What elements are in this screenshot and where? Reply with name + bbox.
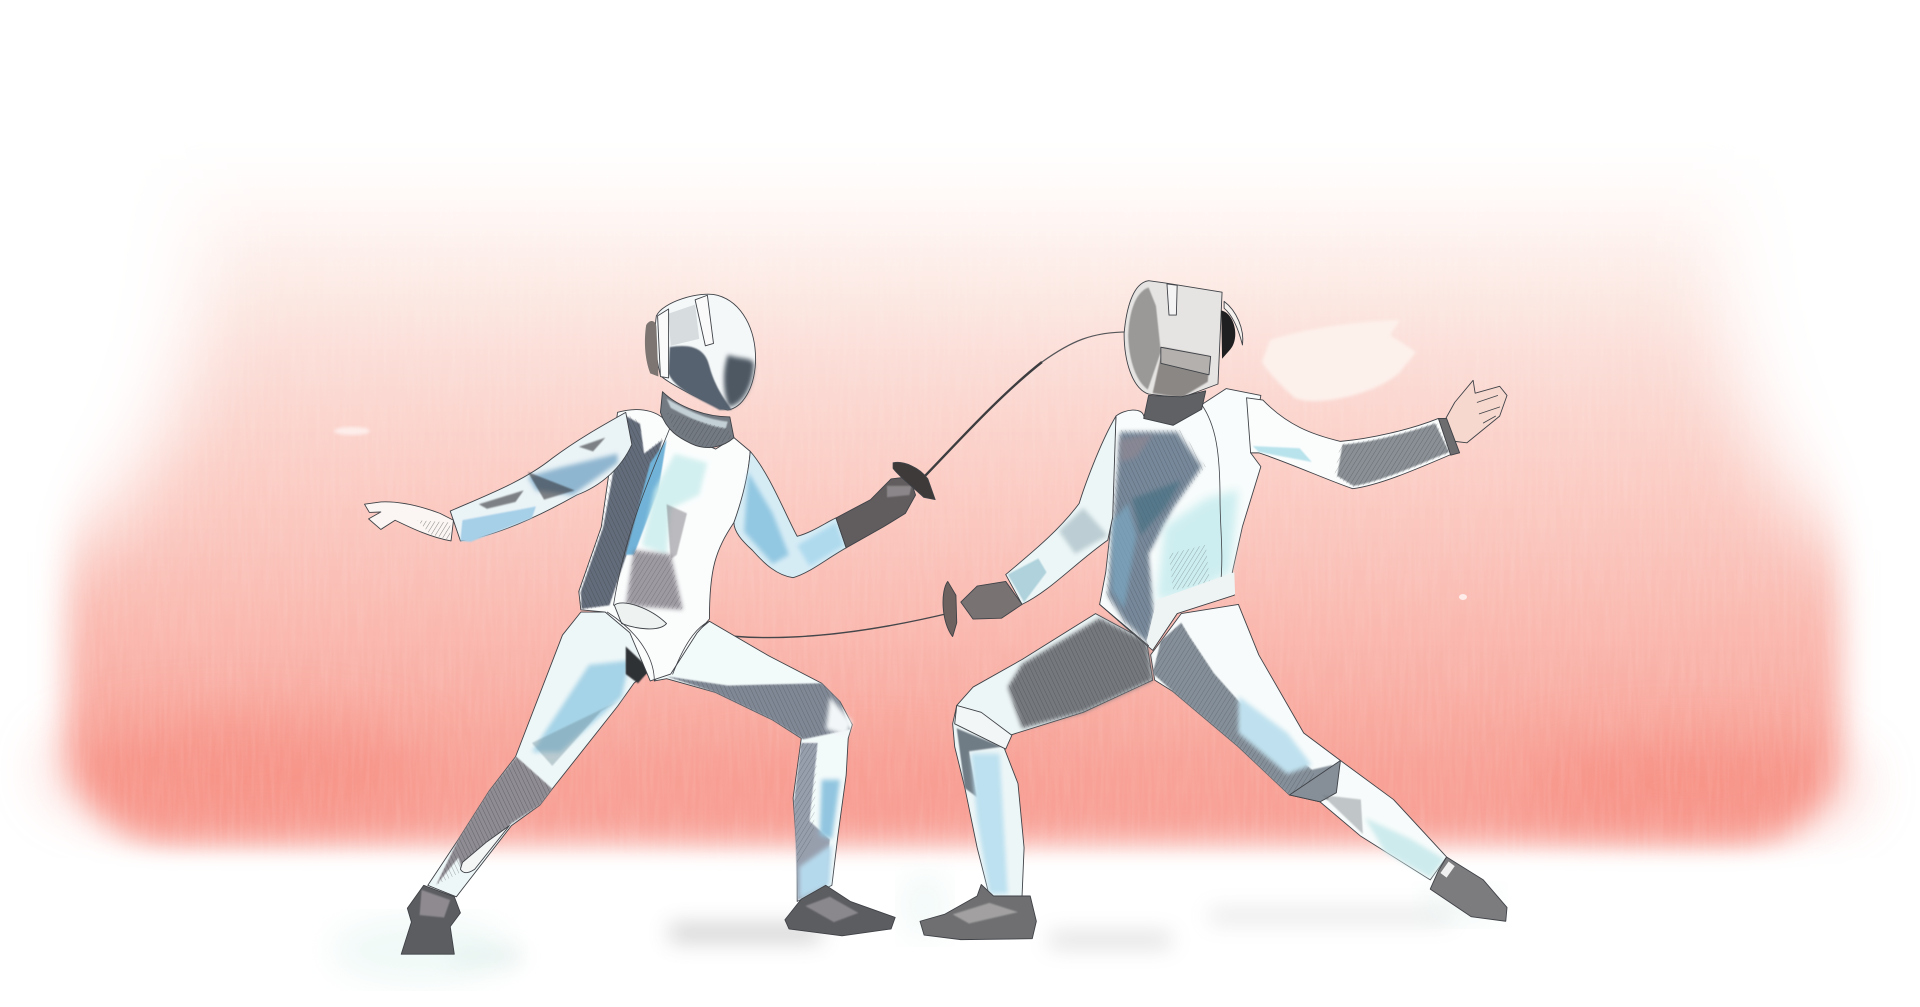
- floor shadows and teal wash: [330, 870, 1500, 984]
- rear shoe: [401, 885, 460, 954]
- front leg: [654, 621, 852, 901]
- glove: [836, 477, 916, 548]
- helmet: [1124, 281, 1222, 398]
- right arm: [1247, 398, 1455, 489]
- left arm: [1006, 416, 1116, 604]
- open hand: [1438, 380, 1507, 455]
- blade: right fencer's foil: [730, 612, 954, 638]
- rear leg (right side): [1151, 604, 1447, 880]
- rear leg: [428, 612, 650, 897]
- guard: [893, 462, 935, 500]
- white splash mark: [1262, 320, 1416, 401]
- helmet: [645, 294, 756, 410]
- guard: [943, 581, 957, 637]
- front shoe: [920, 885, 1036, 940]
- collar: [1144, 391, 1206, 425]
- glove: [961, 581, 1022, 619]
- torso: [579, 410, 750, 681]
- torso: [1100, 389, 1261, 650]
- blade: left fencer's foil: [924, 332, 1133, 477]
- fencer: left: [364, 294, 935, 954]
- fencer: right: [920, 281, 1507, 940]
- rear hand: [364, 502, 453, 541]
- collar: [660, 392, 734, 449]
- front arm: [734, 451, 846, 578]
- hair and ear flap: [1221, 301, 1243, 359]
- front shoe: [785, 885, 895, 936]
- front leg (left side): [953, 614, 1153, 896]
- rear arm: [450, 412, 632, 542]
- rear shoe: [1430, 857, 1507, 921]
